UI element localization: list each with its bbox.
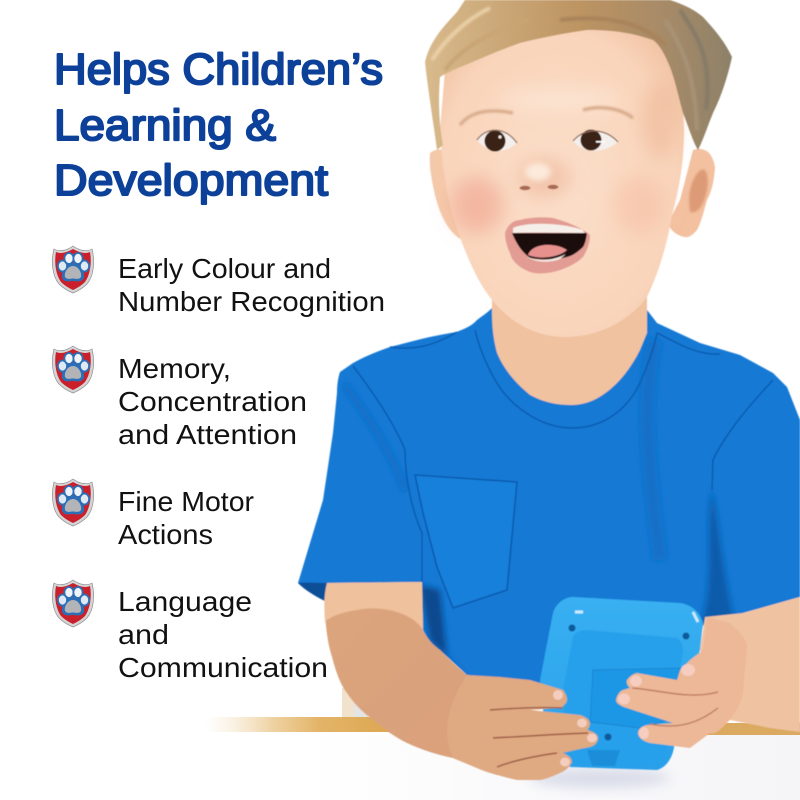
left arm [324, 582, 500, 768]
upper arm lighter area [324, 582, 423, 630]
icon: paw shield [52, 246, 94, 293]
right eye [573, 130, 618, 151]
shirt pocket [415, 475, 517, 608]
benefit text: Communication [118, 652, 328, 683]
shirt shading [345, 340, 735, 680]
left ear [430, 149, 462, 240]
right hand fingers [616, 617, 747, 748]
benefit text [118, 486, 254, 550]
blue t-shirt [298, 308, 800, 690]
benefit text: and [118, 619, 169, 650]
benefit: language and communication [52, 580, 328, 683]
right arm [700, 597, 800, 732]
benefit: memory, concentration and attention [52, 346, 307, 450]
title: Helps Children’s [54, 45, 383, 94]
hair [425, 0, 732, 150]
icon: paw shield [52, 346, 94, 393]
benefit: colour and number recognition [52, 246, 385, 317]
left eye [477, 130, 517, 152]
eyebrows [460, 108, 633, 125]
benefit: fine motor actions [52, 479, 254, 550]
title: Learning & [54, 101, 276, 150]
table and wooden rail [205, 688, 800, 800]
sleeve seams [353, 330, 773, 582]
benefit text [118, 353, 307, 450]
face [440, 20, 684, 337]
benefit text: Actions [118, 519, 213, 550]
benefit text [118, 253, 385, 317]
title [54, 45, 383, 205]
title: Development [54, 156, 328, 205]
cheek blush [451, 80, 678, 235]
benefit text: Concentration [118, 386, 307, 417]
neck [492, 280, 647, 405]
benefit text: Language [118, 586, 252, 617]
icon: paw shield [52, 580, 94, 627]
icon: paw shield [52, 479, 94, 526]
nose [520, 163, 558, 190]
benefit text: Number Recognition [118, 286, 385, 317]
open mouth [505, 217, 590, 274]
left hand fingers [447, 675, 598, 780]
right ear [668, 149, 715, 237]
blue toy device [540, 597, 703, 770]
photo: smiling boy holding a blue toy [298, 0, 800, 780]
benefit text: Memory, [118, 353, 231, 384]
benefit text: and Attention [118, 419, 297, 450]
benefit text [118, 586, 328, 683]
benefit text: Fine Motor [118, 486, 254, 517]
benefit text: Early Colour and [118, 253, 331, 284]
